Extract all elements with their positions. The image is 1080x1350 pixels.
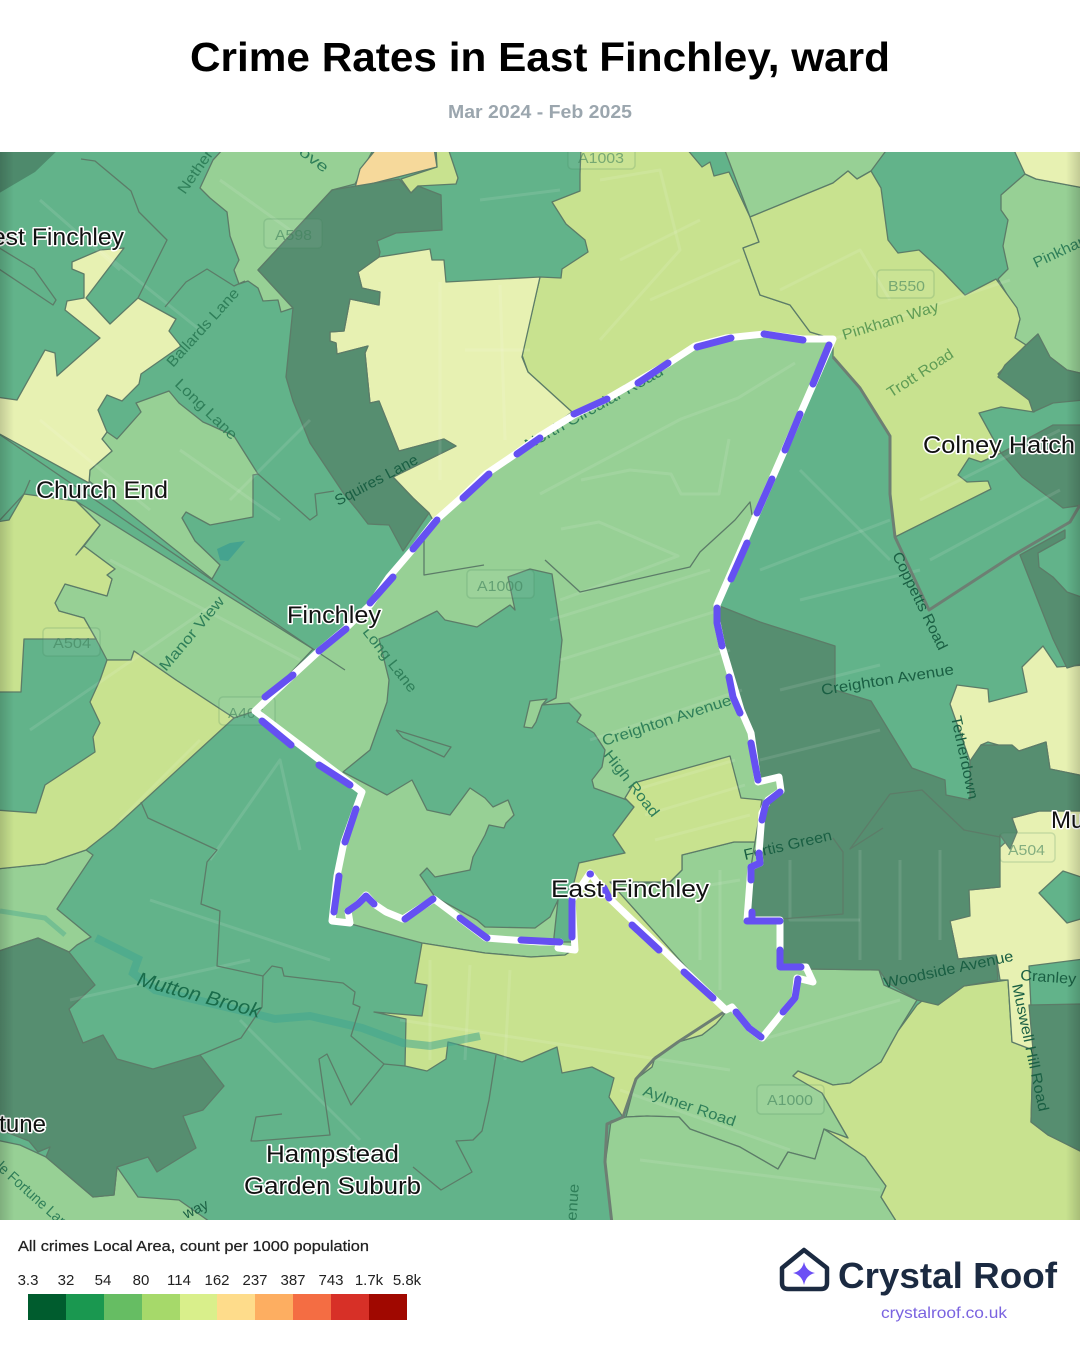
road label: Fortis Green: Fortis Green [742,827,834,864]
river: upper stream [0,911,65,935]
road shield B550: B550 [888,278,925,295]
road label: Grove: Grove [278,130,332,176]
road label: Avenue: Avenue [562,1183,583,1240]
road label: Squires Lane: Squires Lane [332,451,421,510]
place name labels [0,224,1080,1200]
ward boundary: East Finchley dashed outline [255,334,833,1038]
subtitle: date range: Mar 2024 - Feb 2025 [448,102,632,122]
river: Mutton Brook [96,938,480,1046]
road label: North Circular Road: North Circular Road [522,363,666,453]
map areas: dark green low-crime neighbourhoods [0,148,1080,1197]
road shield A504 west [43,628,100,656]
title: Crime Rates in East Finchley, ward [190,34,890,80]
road label: Muswell Hill Road: Muswell Hill Road [1008,982,1052,1113]
map areas: medium green patches inside the ward [343,569,634,942]
legend scale numbers: 32 [58,1272,74,1289]
road shield A1003: A1003 [578,150,624,167]
legend [18,1238,422,1320]
road shield A598: A598 [275,227,312,244]
road shield A406: A406 [228,705,264,722]
region boundary lines [0,159,1000,1190]
road label: Creighton Avenue west: Creighton Avenue [600,692,734,750]
green pond [217,541,245,561]
road label: Coppetts Road: Coppetts Road [888,549,951,653]
road label: High Road: High Road [600,747,662,821]
legend scale numbers: 162 [204,1272,230,1289]
road label: Woodside Avenue: Woodside Avenue [882,948,1015,992]
road shield A504 east: A504 [1008,842,1045,859]
road shield A1003 [568,152,636,170]
place label: Garden Suburb: Garden Suburb [244,1173,421,1200]
road shield B550 [877,270,934,298]
legend scale numbers: 80 [133,1272,149,1289]
road label: Trott Road: Trott Road [884,346,957,401]
ward outline: white line [255,334,833,1038]
legend scale numbers: 237 [242,1272,268,1289]
legend scale numbers [18,1272,422,1289]
legend scale numbers: 54 [95,1272,111,1289]
road label: Cranley: Cranley [1020,967,1077,988]
legend scale numbers: 5.8k [393,1272,422,1289]
legend scale numbers: 3.3 [18,1272,38,1289]
road shield A504 west: A504 [53,635,91,652]
road label: Long Lane central: Long Lane [359,624,420,696]
place label: Hampstead: Hampstead [266,1141,399,1168]
place label: Finchley: Finchley [287,602,381,629]
legend scale numbers: 1.7k [355,1272,384,1289]
map areas: pale yellow neighbourhoods [0,148,1080,1050]
road shield A504 east [1000,833,1055,862]
ward outline: blue dashes [262,334,829,1037]
road shield A1000 south: A1000 [767,1092,813,1109]
icon: house with star [782,1250,827,1289]
road label: Creighton Avenue east: Creighton Avenue [820,661,955,699]
logo: Crystal Roof [782,1250,1058,1322]
road label: Tetherdown: Tetherdown [947,714,981,801]
road label: way: way [180,1196,212,1223]
road label: Ballards Lane: Ballards Lane [163,285,243,371]
legend title: All crimes Local Area, count per 1000 population [18,1238,369,1255]
road label: Pinkham Way: Pinkham Way [840,298,941,344]
map areas: yellow-green neighbourhoods [0,148,1080,1224]
road label: Long Lane north: Long Lane [171,376,241,443]
logo wordmark: Crystal Roof [838,1255,1058,1296]
road shields [43,140,1055,1114]
road shield A1000 north: A1000 [477,578,523,595]
map area: orange high-crime neighbourhood [355,152,438,186]
street network [30,170,1060,1190]
road shield A406 [219,697,275,725]
road shield A1000 north [467,570,534,598]
road label: Nether: Nether [174,147,217,197]
map area: small light notch [524,699,547,728]
logo url: crystalroof.co.uk [881,1305,1008,1322]
place label: Colney Hatch: Colney Hatch [923,432,1075,459]
legend scale numbers: 387 [280,1272,306,1289]
road label: Aylmer Road: Aylmer Road [641,1083,738,1130]
legend scale numbers: 743 [318,1272,344,1289]
place label: East Finchley: East Finchley [551,876,709,903]
road label: Mutton Brook: Mutton Brook [135,969,264,1023]
legend scale numbers: 114 [167,1272,191,1289]
road shield A1000 south [757,1085,824,1114]
thick boundary lines [605,357,1080,1224]
place label: Church End: Church End [36,477,168,504]
road label: Manor View: Manor View [156,593,228,675]
map areas: lighter green neighbourhoods [0,148,1080,1224]
legend colour bar [28,1294,407,1320]
road shield A598 [263,218,311,249]
